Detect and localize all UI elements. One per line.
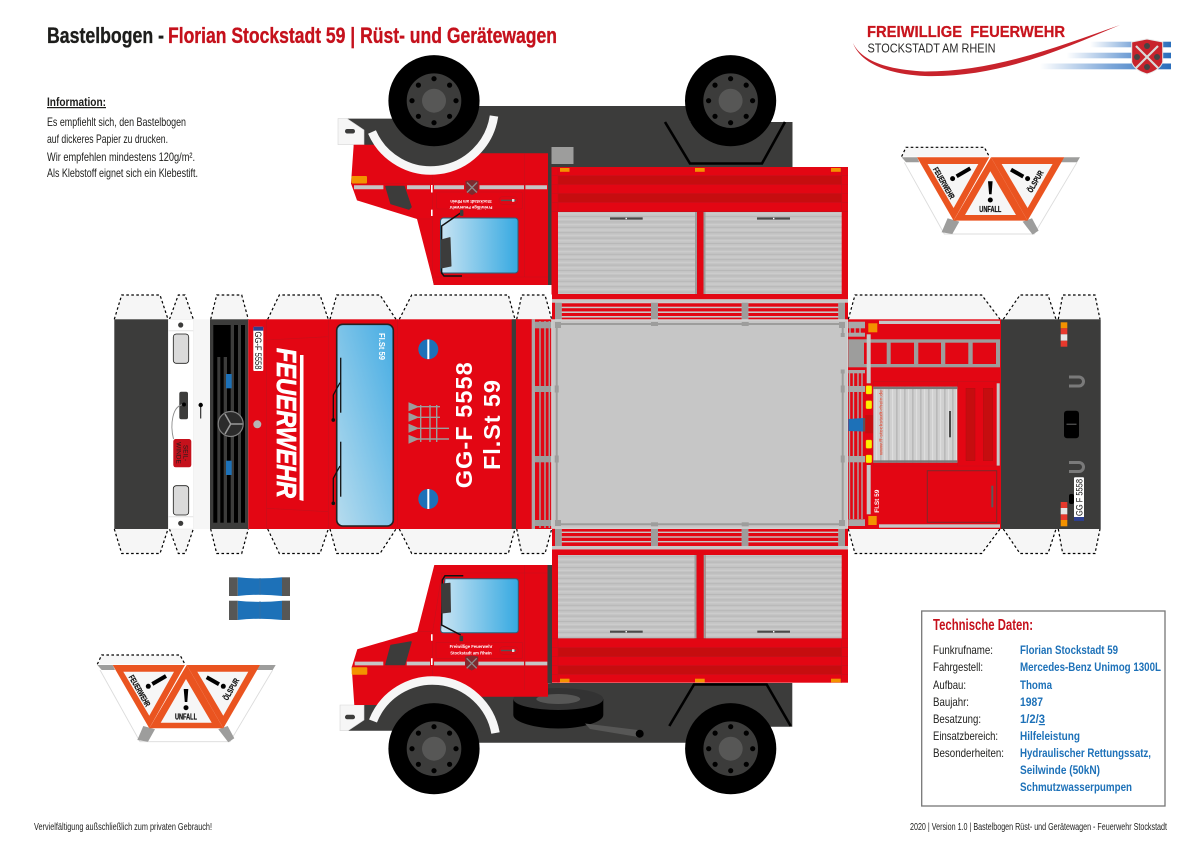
door lettering lower [436, 642, 523, 658]
rear side panels [966, 388, 993, 461]
front strip: bonnet and grille [114, 319, 532, 529]
data labels: Funkrufname: [933, 643, 993, 657]
logo: Freiwillige Feuerwehr [853, 24, 1171, 76]
information text: Es empfiehlt sich, den Bastelbogen [47, 115, 186, 129]
information text [47, 95, 198, 180]
cab panel lines upper [351, 153, 548, 285]
door ticks lower [431, 634, 433, 665]
upper side view of the truck (mirrored) [338, 106, 848, 294]
mirror upper [441, 210, 463, 276]
towing hooks [1069, 377, 1084, 472]
trim strip upper [354, 185, 547, 189]
data labels: Einsatzbereich: [933, 729, 998, 743]
mercedes star [218, 412, 243, 436]
cab lower [352, 565, 548, 705]
warning triangles lower left: FEUERWEHR [127, 674, 152, 708]
data labels [933, 643, 1004, 760]
data labels: Besatzung: [933, 712, 981, 726]
emblem lower [465, 656, 478, 670]
horn symbol [409, 403, 449, 443]
door ticks upper [431, 185, 433, 216]
lamp lower [352, 667, 367, 675]
warning triangles upper right: UNFALL [979, 205, 1001, 214]
rear face of body [848, 319, 1001, 529]
rear number plate [1069, 477, 1084, 521]
small star [253, 420, 261, 428]
logo: Freiwillige Feuerwehr: FREIWILLIGE FEUERWEHR [867, 24, 1065, 41]
windscreen [337, 324, 393, 526]
door lettering upper: Stockstadt am Rhein [450, 199, 492, 204]
lamp upper [352, 176, 367, 184]
cab upper [351, 145, 548, 285]
door lettering upper: Freiwillige Feuerwehr [449, 205, 492, 210]
fender lower [373, 680, 496, 733]
wheel: upper front [388, 55, 480, 146]
rear roller shutter: www.ff-stockstadt-rhein.de [878, 390, 884, 456]
stowage body lower [548, 555, 848, 683]
title: Florian Stockstadt 59 | Rüst- und Gerätewagen [168, 23, 557, 48]
roller shutter upper left [558, 212, 695, 294]
data labels: Besonderheiten: [933, 746, 1004, 760]
lower side view of the truck [340, 555, 848, 743]
cab window upper [440, 218, 518, 273]
trim strip lower [355, 662, 547, 665]
warning triangles upper right: ÖLSPUR [1026, 169, 1046, 194]
cab step window upper [386, 186, 411, 209]
data values: Hydraulischer Rettungssatz, [1020, 746, 1151, 760]
wheel: upper rear [685, 55, 776, 146]
roof call sign [451, 362, 505, 488]
rear rails [848, 322, 865, 526]
grille [210, 319, 248, 529]
arch fill upper [372, 116, 494, 171]
warning triangles lower left: UNFALL [175, 712, 197, 722]
rear wheel arch upper [665, 122, 785, 164]
grey box [552, 147, 574, 164]
data values: 1/2/3 [1020, 712, 1045, 726]
rear roller shutter [873, 387, 957, 463]
cargo bed [552, 320, 848, 528]
data values: Hilfeleistung [1020, 729, 1080, 743]
data values [1020, 643, 1161, 794]
data values: Seilwinde (50kN) [1020, 763, 1100, 777]
logo: Freiwillige Feuerwehr: STOCKSTADT AM RHEIN [868, 42, 996, 56]
chassis upper [347, 106, 792, 170]
white bumper [168, 319, 210, 529]
title [47, 23, 557, 48]
blue mudguard pieces [229, 577, 290, 620]
winch box: SEIL- [182, 445, 188, 461]
data labels: Fahrgestell: [933, 660, 983, 674]
windscreen: Fl.St 59 [377, 333, 386, 361]
blue hose box [848, 415, 873, 433]
roller shutter lower left [558, 555, 694, 638]
rear wheel arch lower [669, 684, 791, 726]
dark panel [114, 319, 168, 529]
feuerwehr lettering: FEUERWEHR [271, 348, 302, 499]
data values: Mercedes-Benz Unimog 1300L [1020, 660, 1161, 674]
front number plate: GG-F 5558 [253, 332, 263, 370]
data values: Thoma [1020, 678, 1052, 692]
cab window lower [441, 579, 518, 633]
front bumper upper [338, 119, 364, 145]
information text: Information: [47, 95, 106, 109]
data labels: Aufbau: [933, 678, 966, 692]
roller shutter lower right [706, 555, 842, 638]
yellow lamps [866, 386, 872, 463]
fender upper [372, 116, 494, 171]
lower rails [552, 528, 848, 555]
data values: Florian Stockstadt 59 [1020, 643, 1118, 657]
blue lights front [418, 339, 438, 509]
panel heading: Technische Daten: [933, 617, 1033, 634]
warning triangles lower left [97, 655, 276, 742]
warning triangles upper right: FEUERWEHR [931, 166, 956, 201]
emblem upper [466, 180, 478, 195]
front bumper lower [340, 705, 364, 731]
rear number plate: GG F 5558 [1074, 479, 1084, 516]
information text: Wir empfehlen mindestens 120g/m². [47, 150, 195, 164]
wipers [332, 358, 341, 504]
door lettering lower: Freiwillige Feuerwehr [450, 644, 493, 649]
rear call sign: Fl.St 59 [874, 489, 881, 513]
tail light bottom [1061, 502, 1067, 526]
door lettering upper [436, 192, 523, 210]
upper rails [552, 294, 848, 319]
footer left: Vervielfältigung außschließlich zum privaten Gebrauch! [34, 821, 212, 833]
chassis lower [348, 683, 792, 743]
roof call sign: Fl.St 59 [479, 380, 505, 470]
tail light top [1061, 322, 1067, 347]
cab panel lines lower [352, 565, 548, 690]
ladder [848, 339, 1000, 367]
data values: Schmutzwasserpumpen [1020, 780, 1132, 794]
winch bar [585, 724, 644, 738]
roof call sign: GG-F 5558 [451, 362, 477, 488]
orange lamps rear [868, 323, 877, 525]
glue tabs [114, 295, 1100, 554]
warning triangles upper right [902, 147, 1080, 235]
winch box [173, 439, 191, 467]
rear rails left [516, 319, 552, 529]
wheel: lower front [388, 703, 480, 794]
red bonnet and cab front [248, 319, 532, 529]
rear door [927, 471, 997, 522]
information text: auf dickeres Papier zu drucken. [47, 132, 168, 146]
information text: Als Klebstoff eignet sich ein Klebestift. [47, 166, 198, 180]
door lettering lower: Stockstadt am Rhein [450, 650, 492, 655]
data labels: Baujahr: [933, 695, 969, 709]
spare wheel [513, 688, 603, 728]
warning triangles lower left: ÖLSPUR [221, 677, 241, 702]
stowage body upper [548, 167, 848, 294]
hitch [1064, 411, 1079, 438]
mirror lower [442, 576, 463, 641]
trim bars rear [867, 321, 1000, 528]
arch fill lower [373, 680, 496, 733]
winch box: WINDE [174, 442, 182, 464]
rear dark panel [1001, 319, 1101, 529]
cab step window lower [386, 642, 411, 664]
technical data panel [922, 611, 1165, 806]
roller shutter upper right [706, 212, 842, 294]
rear compartments outline [873, 382, 1000, 466]
data values: 1987 [1020, 695, 1043, 709]
wheel: lower rear [685, 703, 776, 794]
title: Bastelbogen - [47, 23, 164, 48]
